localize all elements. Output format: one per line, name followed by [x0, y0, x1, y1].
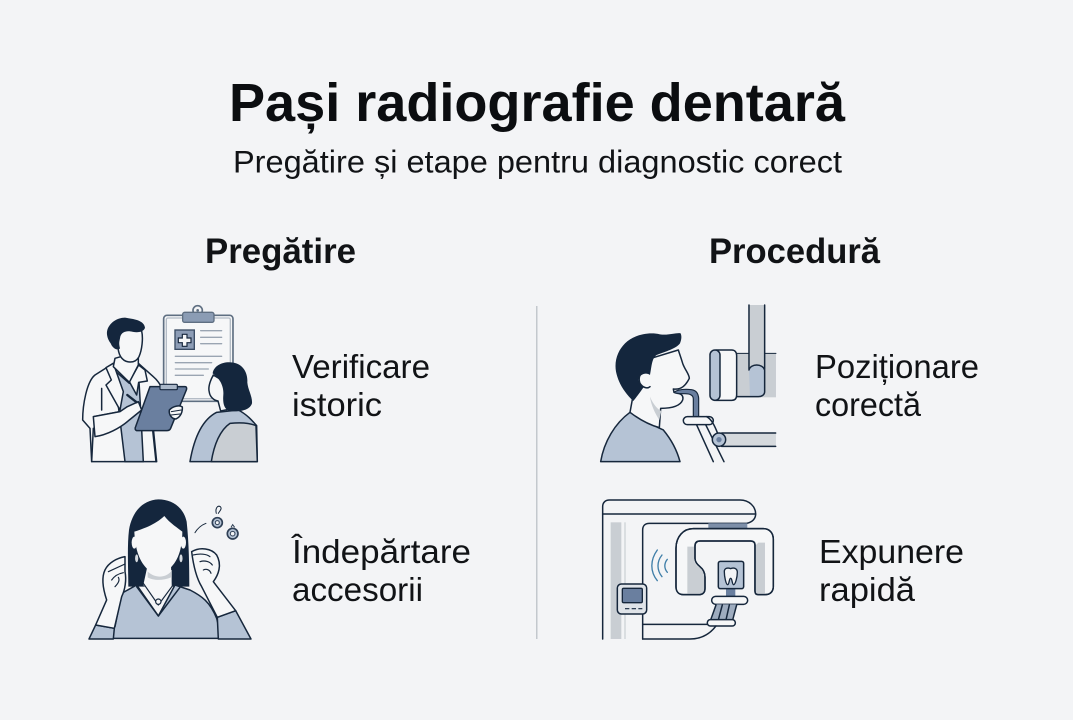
sweater [90, 585, 222, 638]
text: Îndepărtare accesorii: Îndepărtare [291, 533, 471, 570]
icon: panoramic x-ray machine [603, 500, 773, 639]
bite block and chin rest [674, 389, 776, 462]
doctor [83, 318, 187, 462]
patient [190, 362, 257, 462]
text: Expunere rapidă: rapidă [819, 571, 916, 608]
text: Poziționare corectă [815, 348, 979, 423]
text: Expunere rapidă: Expunere [819, 533, 964, 570]
text: Poziționare corectă: Poziționare [815, 348, 979, 385]
icon: woman removing earrings [89, 499, 251, 639]
text: Verificare istoric [292, 348, 430, 423]
text: Verificare istoric: istoric [292, 386, 382, 423]
left hand [96, 557, 126, 628]
neck [143, 565, 172, 600]
wall chart clipboard [164, 306, 233, 401]
radiation waves [652, 550, 667, 581]
tooth sensor [643, 561, 748, 639]
icon: patient at x-ray tube [601, 305, 776, 462]
text: Poziționare corectă: corectă [815, 386, 922, 423]
text: Îndepărtare accesorii: accesorii [292, 571, 423, 608]
face [134, 516, 182, 572]
text: Îndepărtare accesorii [291, 533, 471, 608]
icon: doctor and patient with chart [83, 306, 257, 462]
text: Expunere rapidă [819, 533, 964, 608]
text: Verificare istoric: Verificare [292, 348, 430, 385]
title: Pași radiografie dentară [229, 73, 846, 134]
earrings [195, 523, 206, 533]
C-arm [676, 529, 773, 595]
hair back [128, 499, 189, 587]
heading: Procedură: Procedură [709, 232, 881, 271]
center divider [536, 306, 538, 639]
control panel [617, 584, 647, 614]
column and top housing [603, 500, 756, 639]
subtitle: Pregătire și etape pentru diagnostic corect [233, 144, 842, 180]
right hand [192, 549, 236, 617]
x-ray arm [710, 305, 776, 400]
patient profile [601, 333, 689, 462]
heading: Pregătire: Pregătire [205, 232, 356, 271]
